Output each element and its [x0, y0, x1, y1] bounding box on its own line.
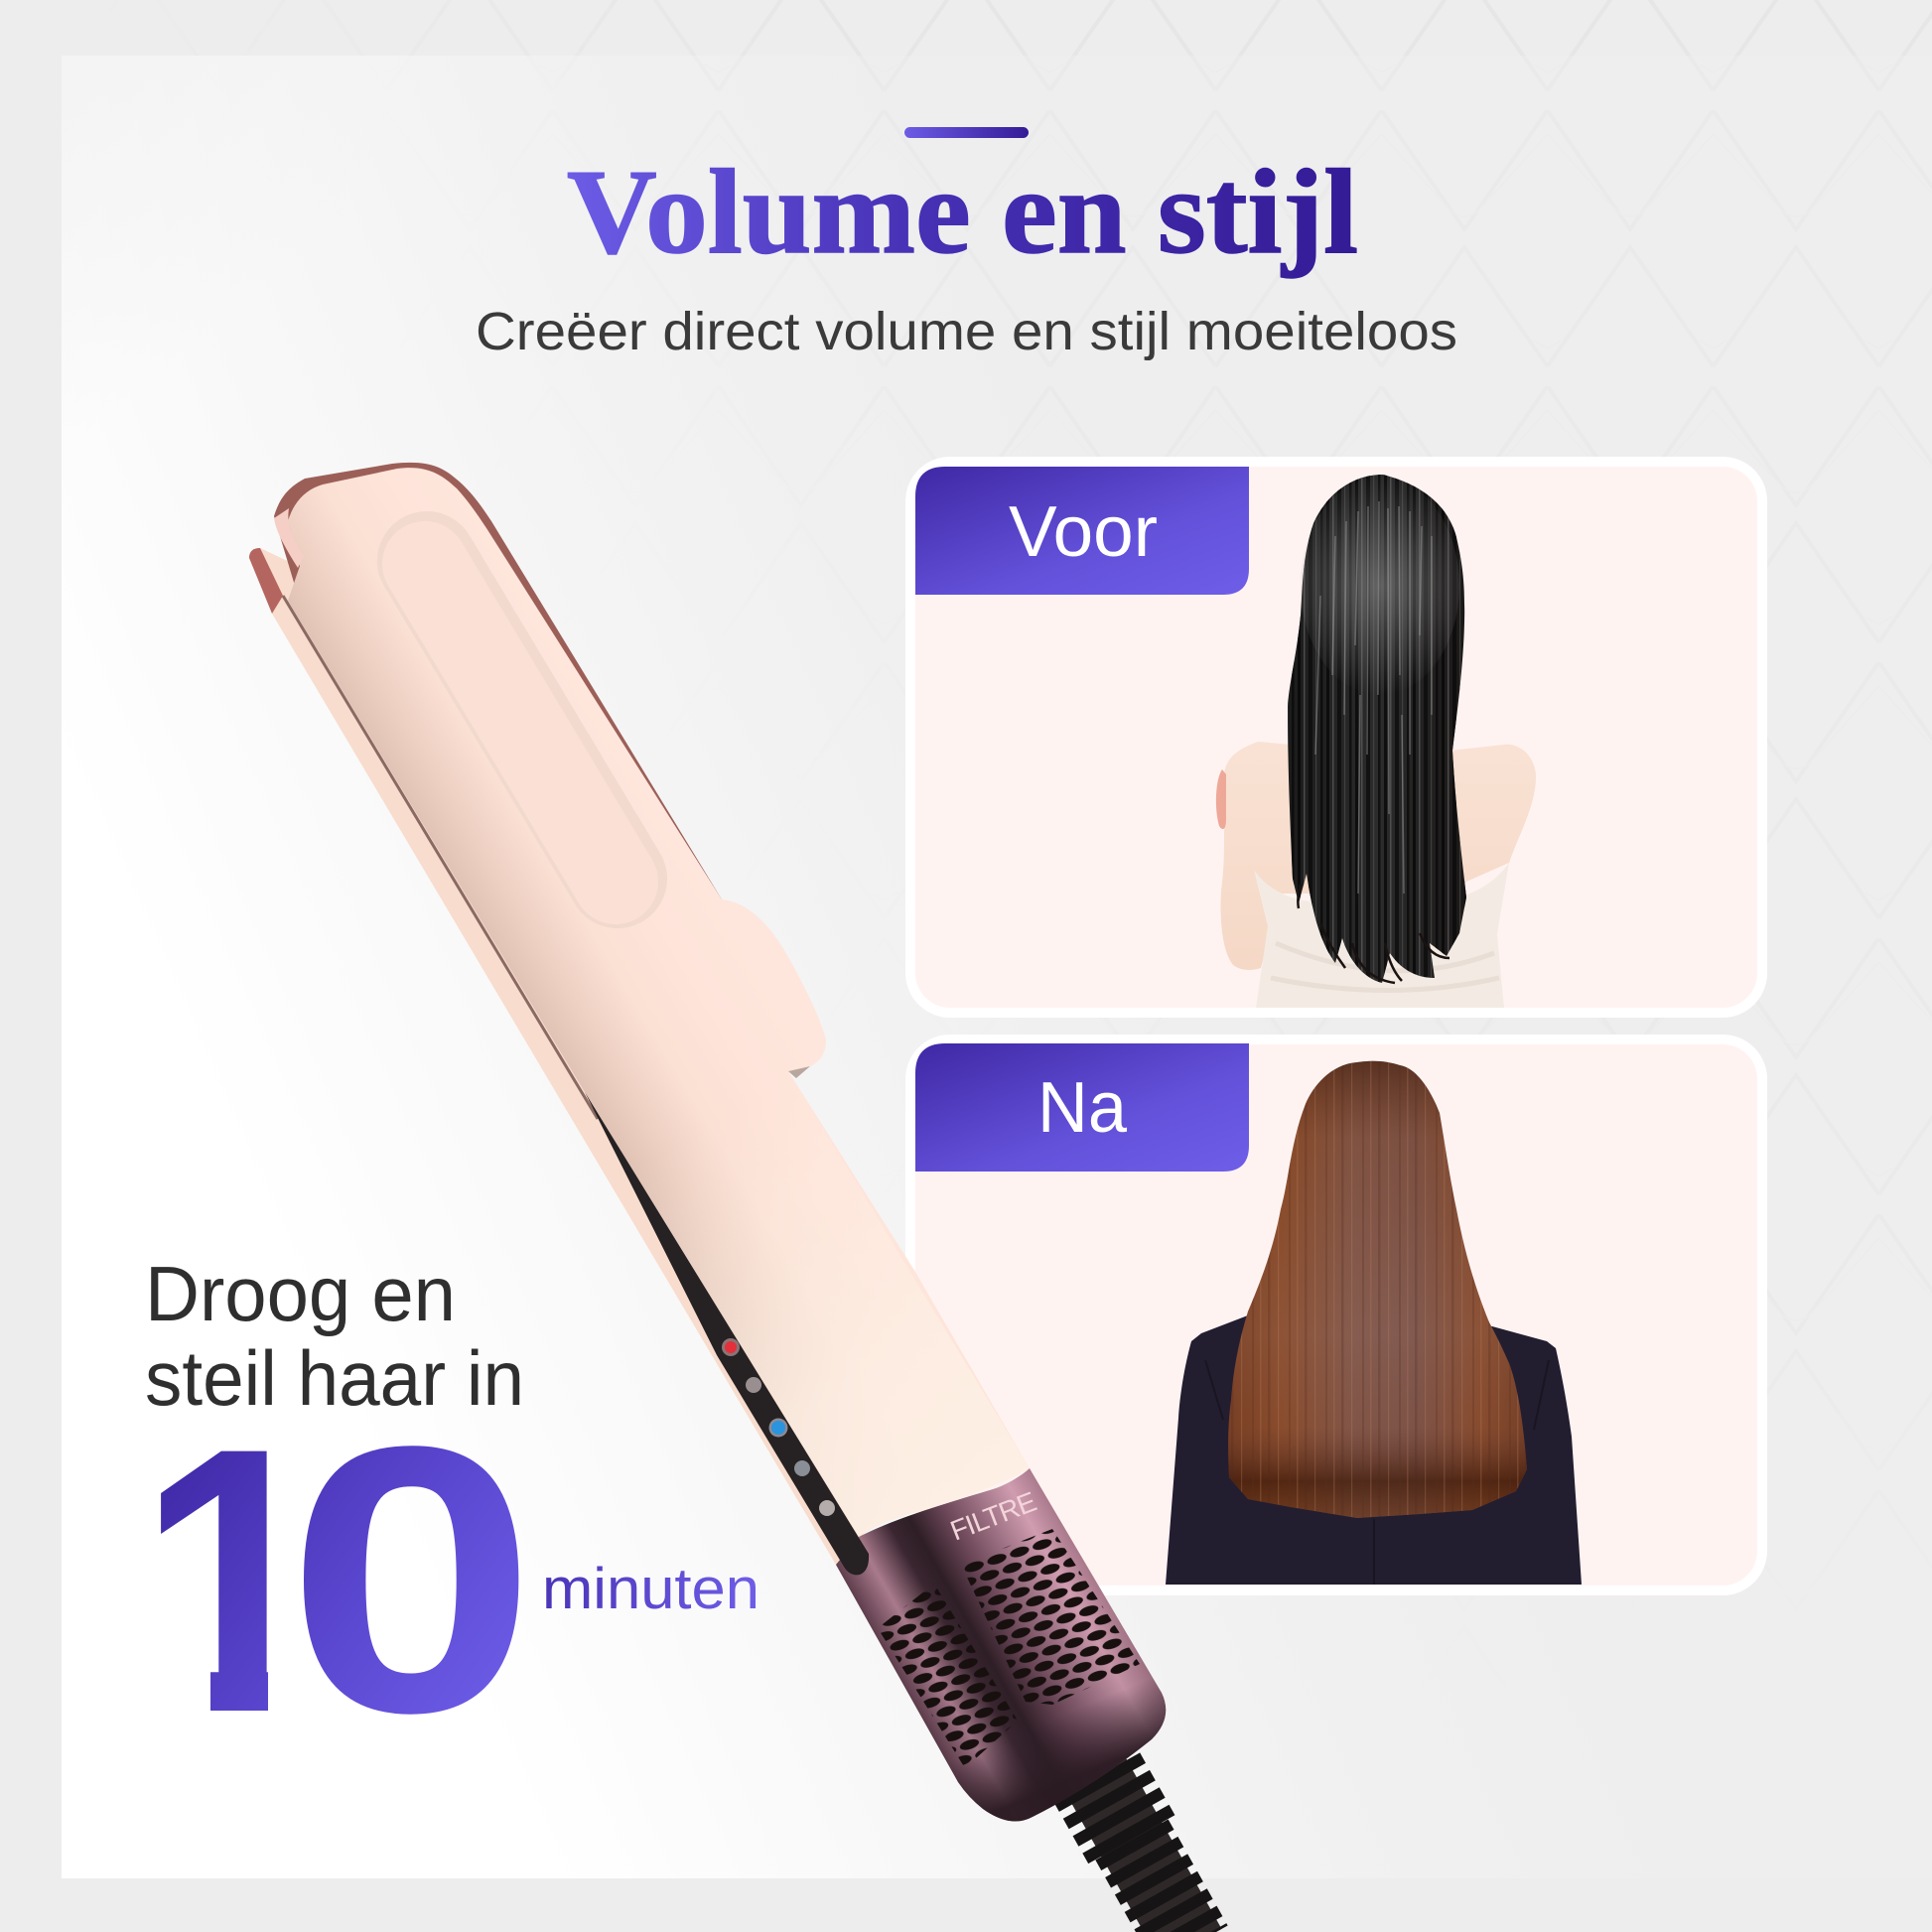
- collar: [836, 1468, 1166, 1821]
- panel: na card: [910, 1039, 1762, 1590]
- accent bar: [904, 127, 1029, 138]
- lower plate: [249, 548, 864, 1565]
- bulge shadow: [788, 1066, 810, 1078]
- text block: droog en steil haar in: Droog en: [145, 1250, 456, 1337]
- vents: [878, 1529, 1140, 1768]
- towel: [1254, 863, 1509, 1008]
- recessed pill: [425, 561, 618, 882]
- jacket seams: [1205, 1360, 1549, 1585]
- dark edge of upper plate: [274, 463, 722, 953]
- product: hair straightener: [249, 463, 1191, 1932]
- jacket: [1166, 1313, 1582, 1585]
- big number 10: [161, 1446, 518, 1715]
- hand: [1216, 769, 1226, 829]
- voor tab: Voor: [1009, 492, 1158, 572]
- photo: wet hair from behind: [1216, 475, 1536, 1008]
- minuten label: minuten: [542, 1557, 759, 1621]
- big number 10: 1: [137, 1369, 332, 1791]
- hairline gap: [283, 596, 598, 1119]
- control strip: [585, 1092, 869, 1575]
- tip highlight: [274, 508, 304, 568]
- big number 10: 0: [286, 1367, 537, 1791]
- wet hair tips: [1298, 884, 1449, 983]
- handle cream overlay: [585, 1071, 1030, 1537]
- panel: voor card: [910, 462, 1762, 1013]
- lower plate rose tip: [249, 548, 283, 614]
- hair: [1228, 1061, 1527, 1518]
- buttons: [722, 1338, 835, 1516]
- photo: straight hair from behind: [1166, 1061, 1582, 1585]
- skin back and arms: [1221, 742, 1536, 970]
- text block: droog en steil haar in: steil haar in: [145, 1334, 524, 1422]
- filtre label: FILTRE: [946, 1485, 1040, 1547]
- subtitle: Creëer direct volume en stijl moeiteloos: [476, 302, 1457, 361]
- hair: [1288, 475, 1466, 983]
- na tab: [915, 1043, 1249, 1172]
- na tab: Na: [1037, 1068, 1128, 1148]
- voor tab: [915, 467, 1249, 595]
- title: Volume en stijl: [567, 145, 1358, 279]
- cord: [1077, 1742, 1191, 1932]
- text block: droog en steil haar in: [145, 1250, 524, 1422]
- upper plate and handle: [288, 468, 1030, 1537]
- hair shine: [1301, 477, 1459, 695]
